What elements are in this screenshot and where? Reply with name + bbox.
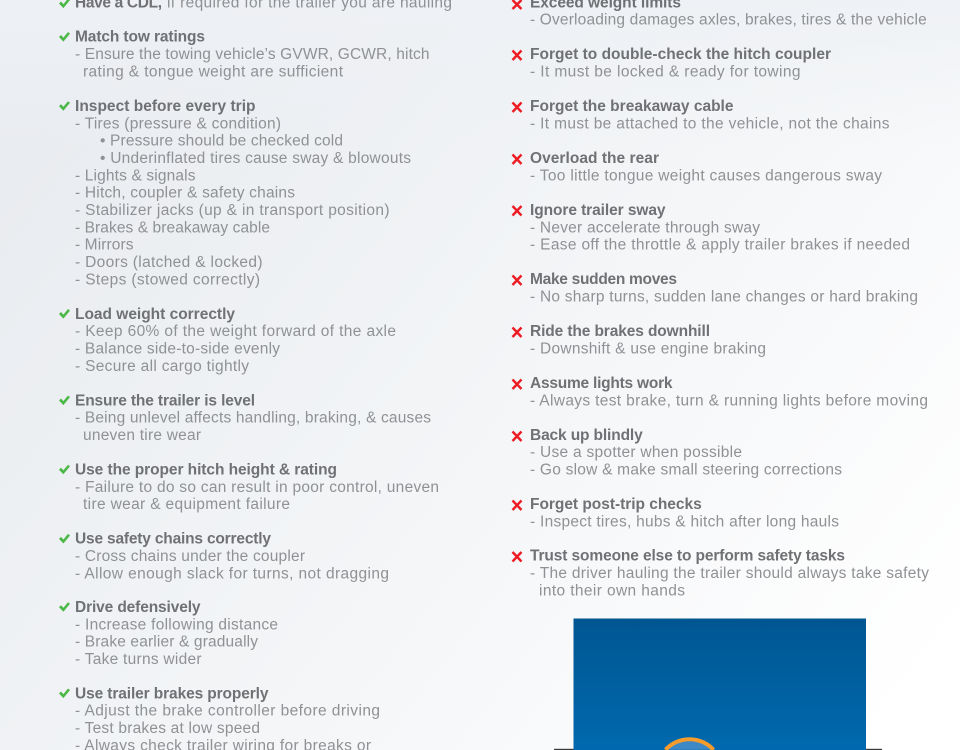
item: match tow ratings [59, 29, 430, 80]
item: drive defensively [59, 599, 278, 668]
item: ignore trailer sway: - Ease off the throttle & apply trailer brakes if needed [530, 237, 910, 254]
item: ignore trailer sway: - Never accelerate through sway [530, 219, 760, 236]
item: ensure the trailer is level [59, 392, 431, 444]
item: use the proper hitch height and rating [59, 462, 439, 513]
item: use trailer brakes properly: - Adjust the brake controller before driving [75, 703, 380, 720]
item: load weight correctly: Load weight correctly [75, 306, 235, 323]
item: ensure the trailer is level: - Being unlevel affects handling, braking, & causes [75, 410, 431, 427]
item: ride the brakes downhill: Ride the brakes downhill [530, 323, 710, 340]
item: use the proper hitch height and rating: Use the proper hitch height & rating [75, 462, 337, 478]
item: overload the rear: Overload the rear [530, 150, 659, 167]
item: assume lights work [512, 375, 928, 409]
item: trust someone else: Trust someone else to perform safety tasks [530, 548, 845, 565]
item: ignore trailer sway [512, 202, 910, 254]
item: forget breakaway cable: - It must be attached to the vehicle, not the chains [530, 115, 890, 132]
item: inspect before every trip: - Tires (pressure & condition) [75, 115, 281, 132]
item: match tow ratings: - Ensure the towing vehicle’s GVWR, GCWR, hitch [75, 46, 430, 63]
item: trust someone else [512, 548, 929, 599]
item: forget hitch coupler check: Forget to double-check the hitch coupler [530, 46, 831, 63]
item: back up blindly: - Go slow & make small steering corrections [530, 462, 842, 478]
item: inspect before every trip: • Underinflated tires cause sway & blowouts [100, 150, 411, 167]
item: trust someone else: - The driver hauling the trailer should always take safety [530, 565, 929, 582]
item: forget post-trip checks: Forget post-trip checks [530, 496, 702, 513]
item: use the proper hitch height and rating: tire wear & equipment failure [83, 496, 290, 513]
item: overload the rear [512, 150, 882, 184]
item: forget breakaway cable: Forget the breakaway cable [530, 98, 734, 115]
item: ride the brakes downhill [512, 323, 766, 358]
item: inspect before every trip [59, 98, 411, 288]
item: use trailer brakes properly: Use trailer brakes properly [75, 685, 269, 702]
item: inspect before every trip: - Hitch, coupler & safety chains [75, 185, 295, 202]
item: overload the rear: - Too little tongue weight causes dangerous sway [530, 167, 882, 184]
item: drive defensively: Drive defensively [75, 599, 201, 616]
item: ensure the trailer is level: uneven tire wear [83, 427, 201, 444]
item: load weight correctly: - Balance side-to-side evenly [75, 340, 280, 358]
item: use trailer brakes properly: - Test brakes at low speed [75, 720, 260, 737]
item: forget breakaway cable [512, 98, 890, 132]
item: match tow ratings: Match tow ratings [75, 29, 205, 46]
item: make sudden moves [512, 271, 918, 305]
item: exceed weight limits: - Overloading damages axles, brakes, tires & the vehicle [530, 12, 927, 28]
item: match tow ratings: rating & tongue weight are sufficient [83, 63, 344, 80]
item: load weight correctly: - Keep 60% of the weight forward of the axle [75, 323, 396, 340]
item: make sudden moves: - No sharp turns, sudden lane changes or hard braking [530, 288, 918, 305]
item: inspect before every trip: - Lights & signals [75, 167, 196, 184]
item: inspect before every trip: - Doors (latched & locked) [75, 254, 262, 271]
item: inspect before every trip: • Pressure should be checked cold [100, 133, 343, 150]
item: assume lights work: - Always test brake, turn & running lights before moving [530, 392, 928, 409]
item: inspect before every trip: - Steps (stowed correctly) [75, 271, 260, 288]
item: inspect before every trip: - Stabilizer jacks (up & in transport position) [75, 202, 390, 219]
item: inspect before every trip: Inspect before every trip [75, 98, 256, 115]
item: load weight correctly: - Secure all cargo tightly [75, 358, 249, 375]
item: exceed weight limits [512, 0, 927, 29]
item: forget hitch coupler check: - It must be locked & ready for towing [530, 63, 800, 80]
item: inspect before every trip: - Brakes & breakaway cable [75, 219, 270, 236]
item: drive defensively: - Brake earlier & gradually [75, 634, 258, 651]
item: use safety chains correctly: Use safety chains correctly [75, 531, 271, 548]
item: ensure the trailer is level: Ensure the trailer is level [75, 392, 255, 409]
item: use safety chains correctly: - Cross chains under the coupler [75, 548, 305, 565]
item: back up blindly: - Use a spotter when possible [530, 444, 742, 461]
item: make sudden moves: Make sudden moves [530, 271, 677, 288]
item: trust someone else: into their own hands [539, 582, 685, 599]
panel: blue trailer illustration [554, 618, 882, 750]
item: load weight correctly [59, 306, 396, 375]
icon: orange circle badge [666, 739, 714, 750]
item: inspect before every trip: - Mirrors [75, 237, 134, 254]
item: assume lights work: Assume lights work [530, 375, 673, 392]
panel: do's checklist [59, 0, 452, 750]
item: drive defensively: - Increase following distance [75, 616, 278, 633]
item: forget post-trip checks: - Inspect tires, hubs & hitch after long hauls [530, 514, 839, 530]
item: use the proper hitch height and rating: - Failure to do so can result in poor control, uneven [75, 479, 439, 496]
item: use safety chains correctly [59, 531, 389, 582]
item: use trailer brakes properly [59, 685, 380, 750]
item: back up blindly: Back up blindly [530, 427, 643, 444]
item: forget hitch coupler check [512, 46, 831, 80]
panel: don'ts checklist [512, 0, 929, 599]
item: use safety chains correctly: - Allow enough slack for turns, not dragging [75, 565, 389, 582]
item: forget post-trip checks [512, 496, 839, 530]
item: back up blindly [512, 427, 842, 478]
item: drive defensively: - Take turns wider [75, 651, 202, 668]
item: ride the brakes downhill: - Downshift & use engine braking [530, 340, 766, 358]
item: ignore trailer sway: Ignore trailer sway [530, 202, 666, 219]
